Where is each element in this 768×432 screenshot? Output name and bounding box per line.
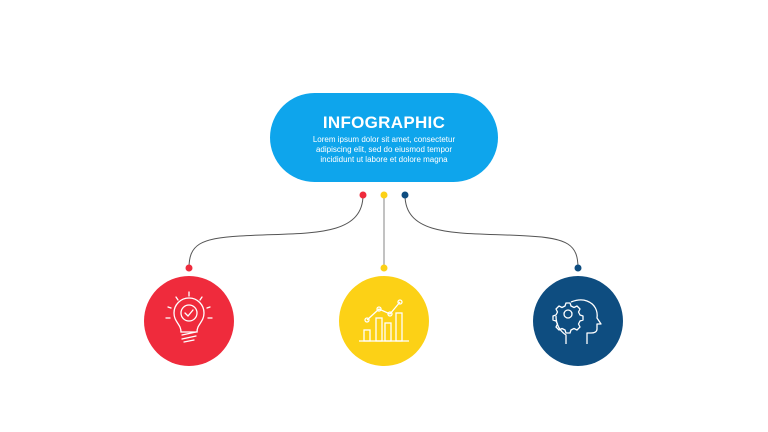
- icon: head with gear: [553, 300, 601, 344]
- circle: navy head: [533, 276, 623, 366]
- title pill: [270, 93, 498, 182]
- circle: yellow chart: [339, 276, 429, 366]
- description text: incididunt ut labore et dolore magna: [320, 155, 448, 164]
- description text: [313, 135, 456, 164]
- connector: red: [186, 192, 366, 272]
- connector: navy: [402, 192, 582, 272]
- description text: Lorem ipsum dolor sit amet, consectetur: [313, 135, 455, 144]
- icon: lightbulb: [166, 292, 212, 342]
- circle: red lightbulb: [144, 276, 234, 366]
- icon: bar chart: [359, 300, 409, 341]
- connector: yellow: [380, 192, 388, 272]
- description text: adipiscing elit, sed do eiusmod tempor: [316, 145, 452, 154]
- heading: INFOGRAPHIC: [323, 113, 445, 132]
